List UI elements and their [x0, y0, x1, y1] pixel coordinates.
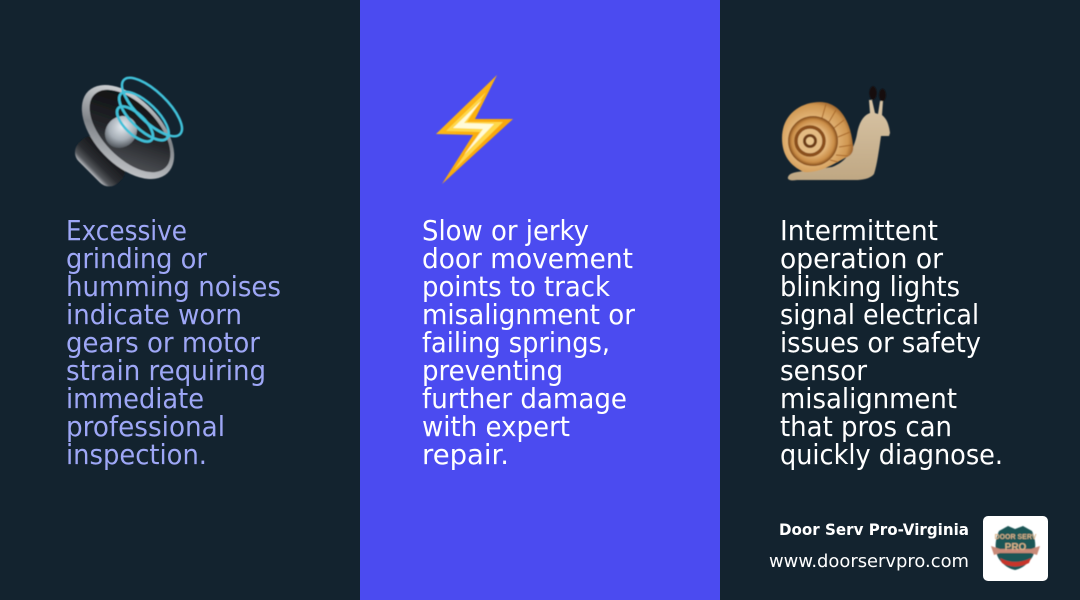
text: electrical warning: that pros can — [780, 412, 952, 443]
panel: noise background — [0, 0, 360, 600]
text: noise warning: humming noises — [66, 272, 281, 303]
text: electrical warning: sensor — [780, 356, 868, 387]
text: movement warning: with expert — [422, 412, 570, 443]
text: movement warning: door movement — [422, 244, 633, 275]
text: electrical warning: blinking lights — [780, 272, 960, 303]
text: noise warning: gears or motor — [66, 328, 261, 359]
logo: Door Serv Pro badge — [983, 516, 1048, 581]
website url: www.doorservpro.com — [769, 551, 969, 572]
text: electrical warning: misalignment — [780, 384, 957, 415]
text: electrical warning: signal electrical — [780, 300, 979, 331]
text: noise warning: inspection. — [66, 440, 207, 471]
icon: lightning bolt — [436, 75, 513, 184]
logo: Door Serv Pro badge: DOOR SERV — [995, 534, 1037, 541]
text: electrical warning: operation or — [780, 244, 944, 275]
icon: snail — [782, 86, 890, 180]
text: movement warning: repair. — [422, 440, 509, 471]
company name: Door Serv Pro-Virginia — [779, 520, 969, 539]
text: movement warning: points to track — [422, 272, 610, 303]
text: noise warning: grinding or — [66, 244, 208, 275]
text: noise warning: professional — [66, 412, 225, 443]
text: electrical warning: quickly diagnose. — [780, 440, 1003, 471]
text: noise warning: Excessive — [66, 216, 187, 247]
text: electrical warning: Intermittent — [780, 216, 938, 247]
text: noise warning: strain requiring — [66, 356, 266, 387]
text: movement warning: further damage — [422, 384, 627, 415]
text: movement warning — [422, 216, 636, 471]
text: movement warning: Slow or jerky — [422, 216, 589, 247]
text: movement warning: preventing — [422, 356, 563, 387]
text: noise warning — [66, 216, 281, 471]
logo: Door Serv Pro badge: PRO — [1005, 542, 1027, 553]
panel: electrical background — [720, 0, 1080, 600]
text: noise warning: indicate worn — [66, 300, 242, 331]
text: noise warning: immediate — [66, 384, 204, 415]
text: electrical warning: issues or safety — [780, 328, 981, 359]
icon: speaker — [65, 68, 191, 196]
text: movement warning: misalignment or — [422, 300, 636, 331]
text: movement warning: failing springs, — [422, 328, 610, 359]
text: electrical warning — [780, 216, 1003, 471]
panel: movement background — [360, 0, 720, 600]
